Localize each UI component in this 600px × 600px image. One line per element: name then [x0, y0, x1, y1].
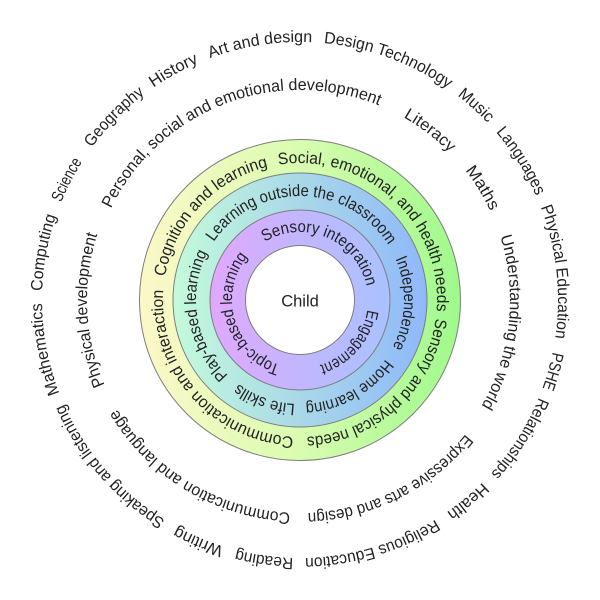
label: Sensory integration: Sensory integration [262, 223, 375, 286]
label: Social, emotional, and health needs: Social, emotional, and health needs [278, 151, 449, 311]
label: History: History [148, 54, 196, 87]
label: Music: Music [458, 88, 492, 122]
label: Speaking and listening: Speaking and listening [56, 404, 164, 528]
label: Reading: Reading [235, 548, 292, 570]
label: Life skills: Life skills [235, 385, 294, 416]
label: Play-based learning: Play-based learning [184, 250, 228, 382]
label: Design Technology: Design Technology [325, 32, 453, 88]
label: Engagement: Engagement [320, 310, 378, 375]
outer coloured ring [139, 139, 461, 461]
label: Writing: Writing [174, 525, 220, 558]
label: Personal, social and emotional development: Personal, social and emotional development [101, 78, 382, 208]
centre circle with Child [246, 246, 354, 354]
ring disc: purple to periwinkle [210, 210, 390, 390]
label: Communication and interaction: Communication and interaction [151, 290, 292, 448]
label: Expressive arts and design: Expressive arts and design [308, 435, 474, 524]
label: Art and design: Art and design [210, 30, 312, 58]
label: Mathematics: Mathematics [30, 304, 59, 396]
label: Science: Science [52, 158, 81, 201]
label: Communication and language: Communication and language [111, 410, 290, 524]
label: Cognition and learning: Cognition and learning [154, 158, 268, 275]
second coloured ring [172, 172, 428, 428]
centre disc [246, 246, 354, 354]
label: Relationships: Relationships [492, 398, 549, 478]
ring disc: yellow to green [140, 140, 460, 460]
label: Geography: Geography [85, 87, 143, 145]
label: Learning outside the classroom: Learning outside the classroom [205, 184, 394, 244]
third coloured ring [210, 210, 390, 390]
ring disc: mint to blue [173, 173, 427, 427]
label: Maths: Maths [466, 164, 497, 210]
label: Physical development: Physical development [75, 232, 104, 388]
label: Literacy: Literacy [404, 108, 456, 151]
label: Child: Child [281, 292, 319, 310]
label: Topic-based learning: Topic-based learning [220, 252, 277, 376]
label: Understanding the world: Understanding the world [482, 234, 522, 411]
label: Sensory and physical needs: Sensory and physical needs [307, 319, 446, 448]
label: Religious Education: Religious Education [306, 520, 440, 569]
label: Health: Health [448, 483, 490, 518]
label: PSHE: PSHE [542, 353, 564, 392]
label: Home learning: Home learning [306, 360, 394, 414]
label: Computing: Computing [30, 214, 58, 290]
label: Physical Education: Physical Education [541, 204, 570, 338]
label: Independence: Independence [394, 256, 415, 350]
label: Languages: Languages [496, 126, 543, 195]
